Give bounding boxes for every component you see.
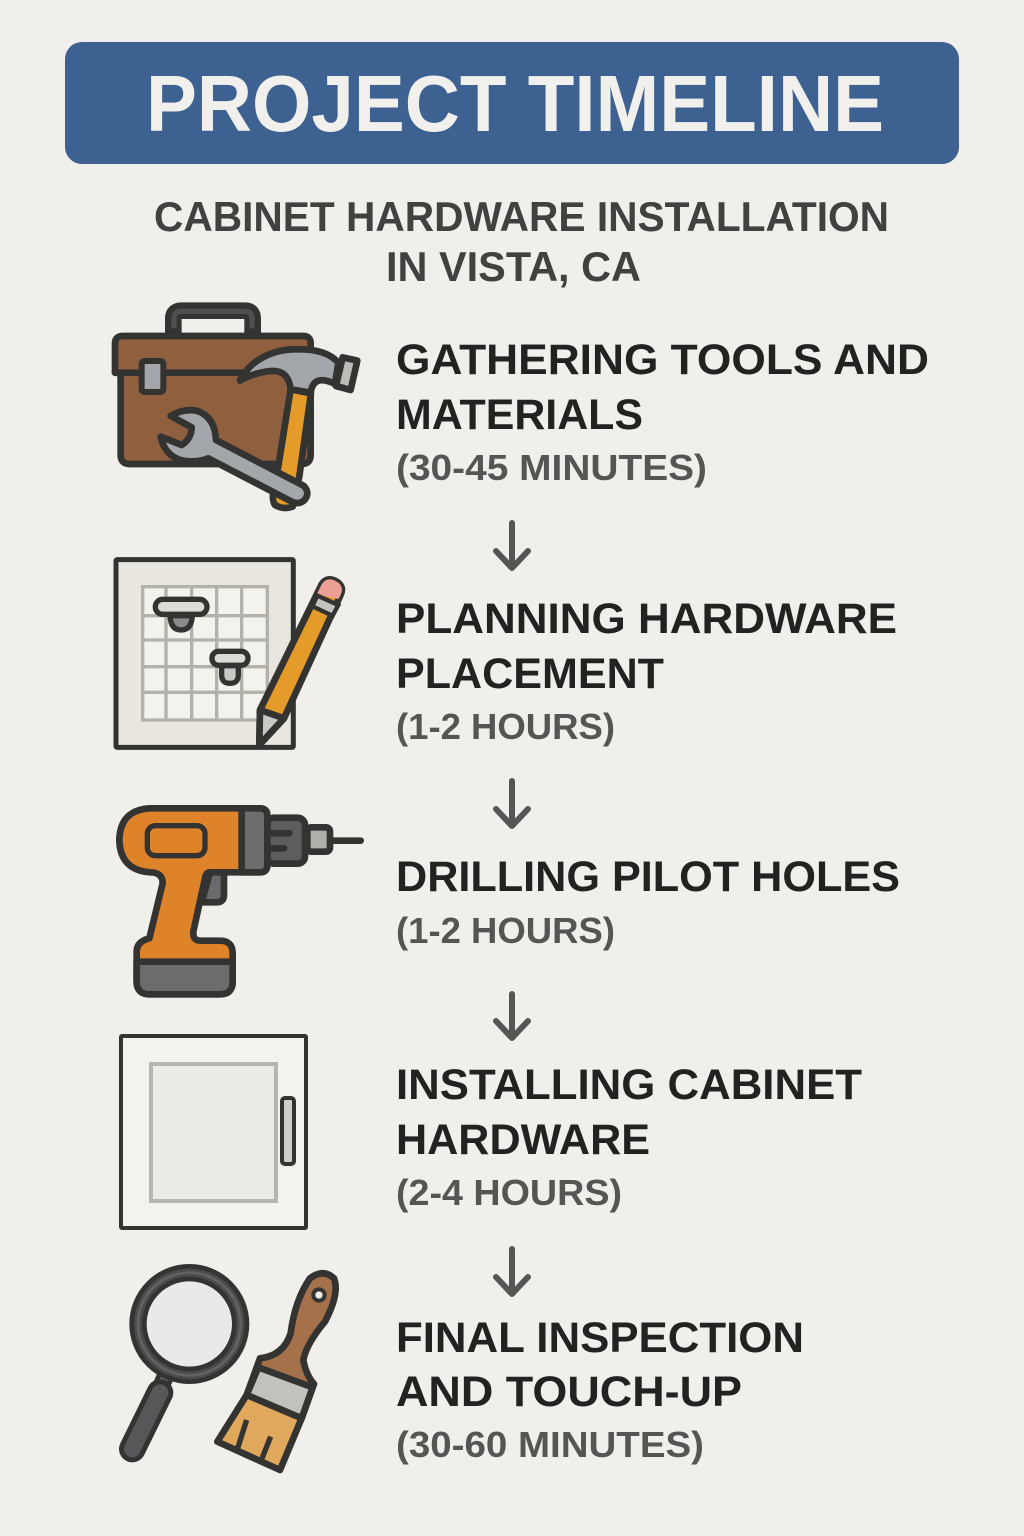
- step 4 text: INSTALLING CABINET: [396, 1061, 862, 1109]
- title: PROJECT TIMELINE: [146, 59, 884, 148]
- icon: hardware placement template with pencil: [116, 560, 342, 747]
- arrow 3: [496, 994, 528, 1038]
- title banner: [65, 42, 959, 164]
- step 5 text: (30-60 MINUTES): [396, 1424, 704, 1465]
- step 2 text: [396, 595, 897, 747]
- step 4 text: HARDWARE: [396, 1116, 650, 1164]
- subtitle: CABINET HARDWARE INSTALLATION: [154, 193, 889, 240]
- subtitle: [154, 193, 889, 290]
- step 2 text: PLACEMENT: [396, 650, 664, 698]
- arrow 4: [496, 1249, 528, 1294]
- step 3 text: [396, 853, 900, 951]
- step 2 text: PLANNING HARDWARE: [396, 595, 897, 643]
- icon: cordless drill: [119, 808, 361, 994]
- step 4 text: [396, 1061, 862, 1213]
- subtitle: IN VISTA, CA: [386, 243, 641, 290]
- step 2 text: (1-2 HOURS): [396, 706, 615, 747]
- step 1 text: (30-45 MINUTES): [396, 447, 707, 488]
- step 4 text: (2-4 HOURS): [396, 1172, 622, 1213]
- step 5 text: AND TOUCH-UP: [396, 1368, 742, 1416]
- step 5 text: FINAL INSPECTION: [396, 1314, 804, 1362]
- icon: toolbox with hammer and wrench: [115, 311, 357, 508]
- step 1 text: [396, 336, 929, 488]
- icon: magnifying glass and paint brush: [132, 1273, 336, 1470]
- step 3 text: (1-2 HOURS): [396, 910, 615, 951]
- step 1 text: GATHERING TOOLS AND: [396, 336, 929, 384]
- icon: cabinet door: [121, 1036, 306, 1228]
- step 3 text: DRILLING PILOT HOLES: [396, 853, 900, 901]
- step 1 text: MATERIALS: [396, 391, 643, 439]
- arrow 1: [496, 523, 528, 568]
- arrow 2: [496, 781, 528, 826]
- step 5 text: [396, 1314, 804, 1465]
